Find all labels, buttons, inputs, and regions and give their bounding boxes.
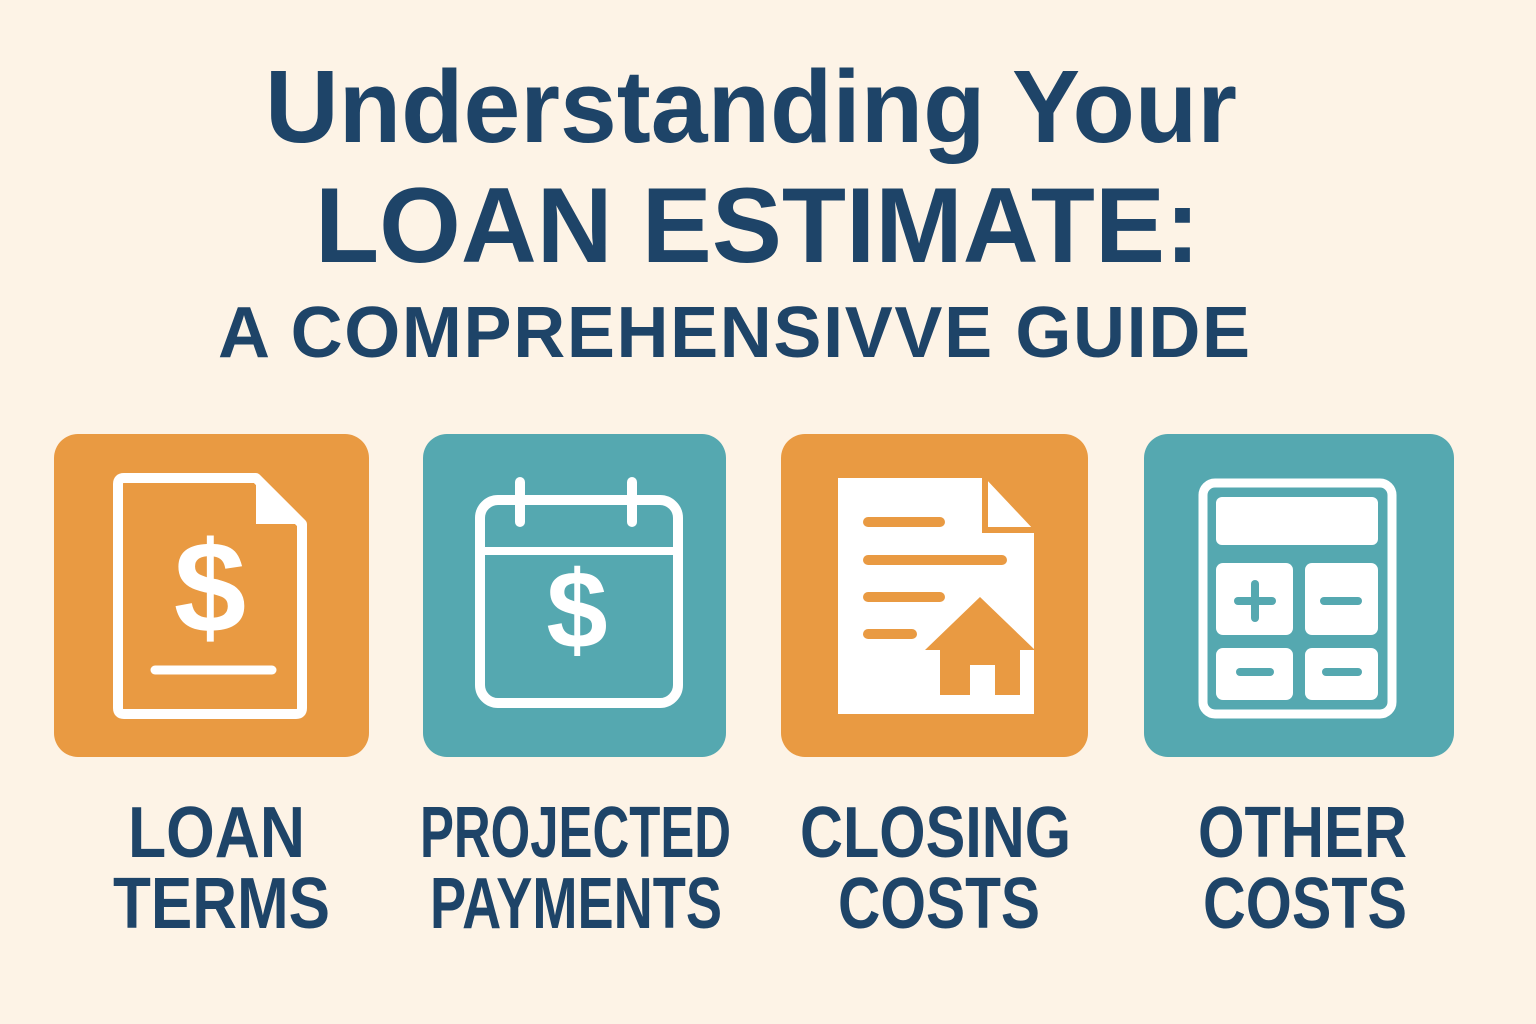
label: loan terms: [113, 793, 330, 944]
panel: projected payments icon: $: [546, 549, 608, 672]
label: loan terms: LOAN: [128, 793, 305, 873]
label: other costs: [1198, 793, 1407, 944]
label: other costs: COSTS: [1203, 864, 1407, 944]
label: closing costs: COSTS: [838, 864, 1040, 944]
panel: loan terms icon: $: [174, 514, 246, 660]
label: projected payments: PROJECTED: [420, 793, 731, 873]
label: loan terms: TERMS: [113, 864, 330, 944]
label: projected payments: [420, 793, 731, 944]
panel: other costs icon: [1144, 434, 1454, 757]
title: A COMPREHENSIVVE GUIDE: [218, 293, 1250, 373]
title: [218, 49, 1250, 373]
label: closing costs: CLOSING: [800, 793, 1071, 873]
label: closing costs: [800, 793, 1071, 944]
title: LOAN ESTIMATE:: [315, 165, 1200, 285]
title: Understanding Your: [265, 49, 1237, 164]
label: projected payments: PAYMENTS: [430, 864, 722, 944]
label: other costs: OTHER: [1198, 793, 1407, 873]
panel: projected payments icon: [423, 434, 726, 757]
panel: closing costs icon: [781, 434, 1088, 757]
panel: loan terms icon: [54, 434, 369, 757]
